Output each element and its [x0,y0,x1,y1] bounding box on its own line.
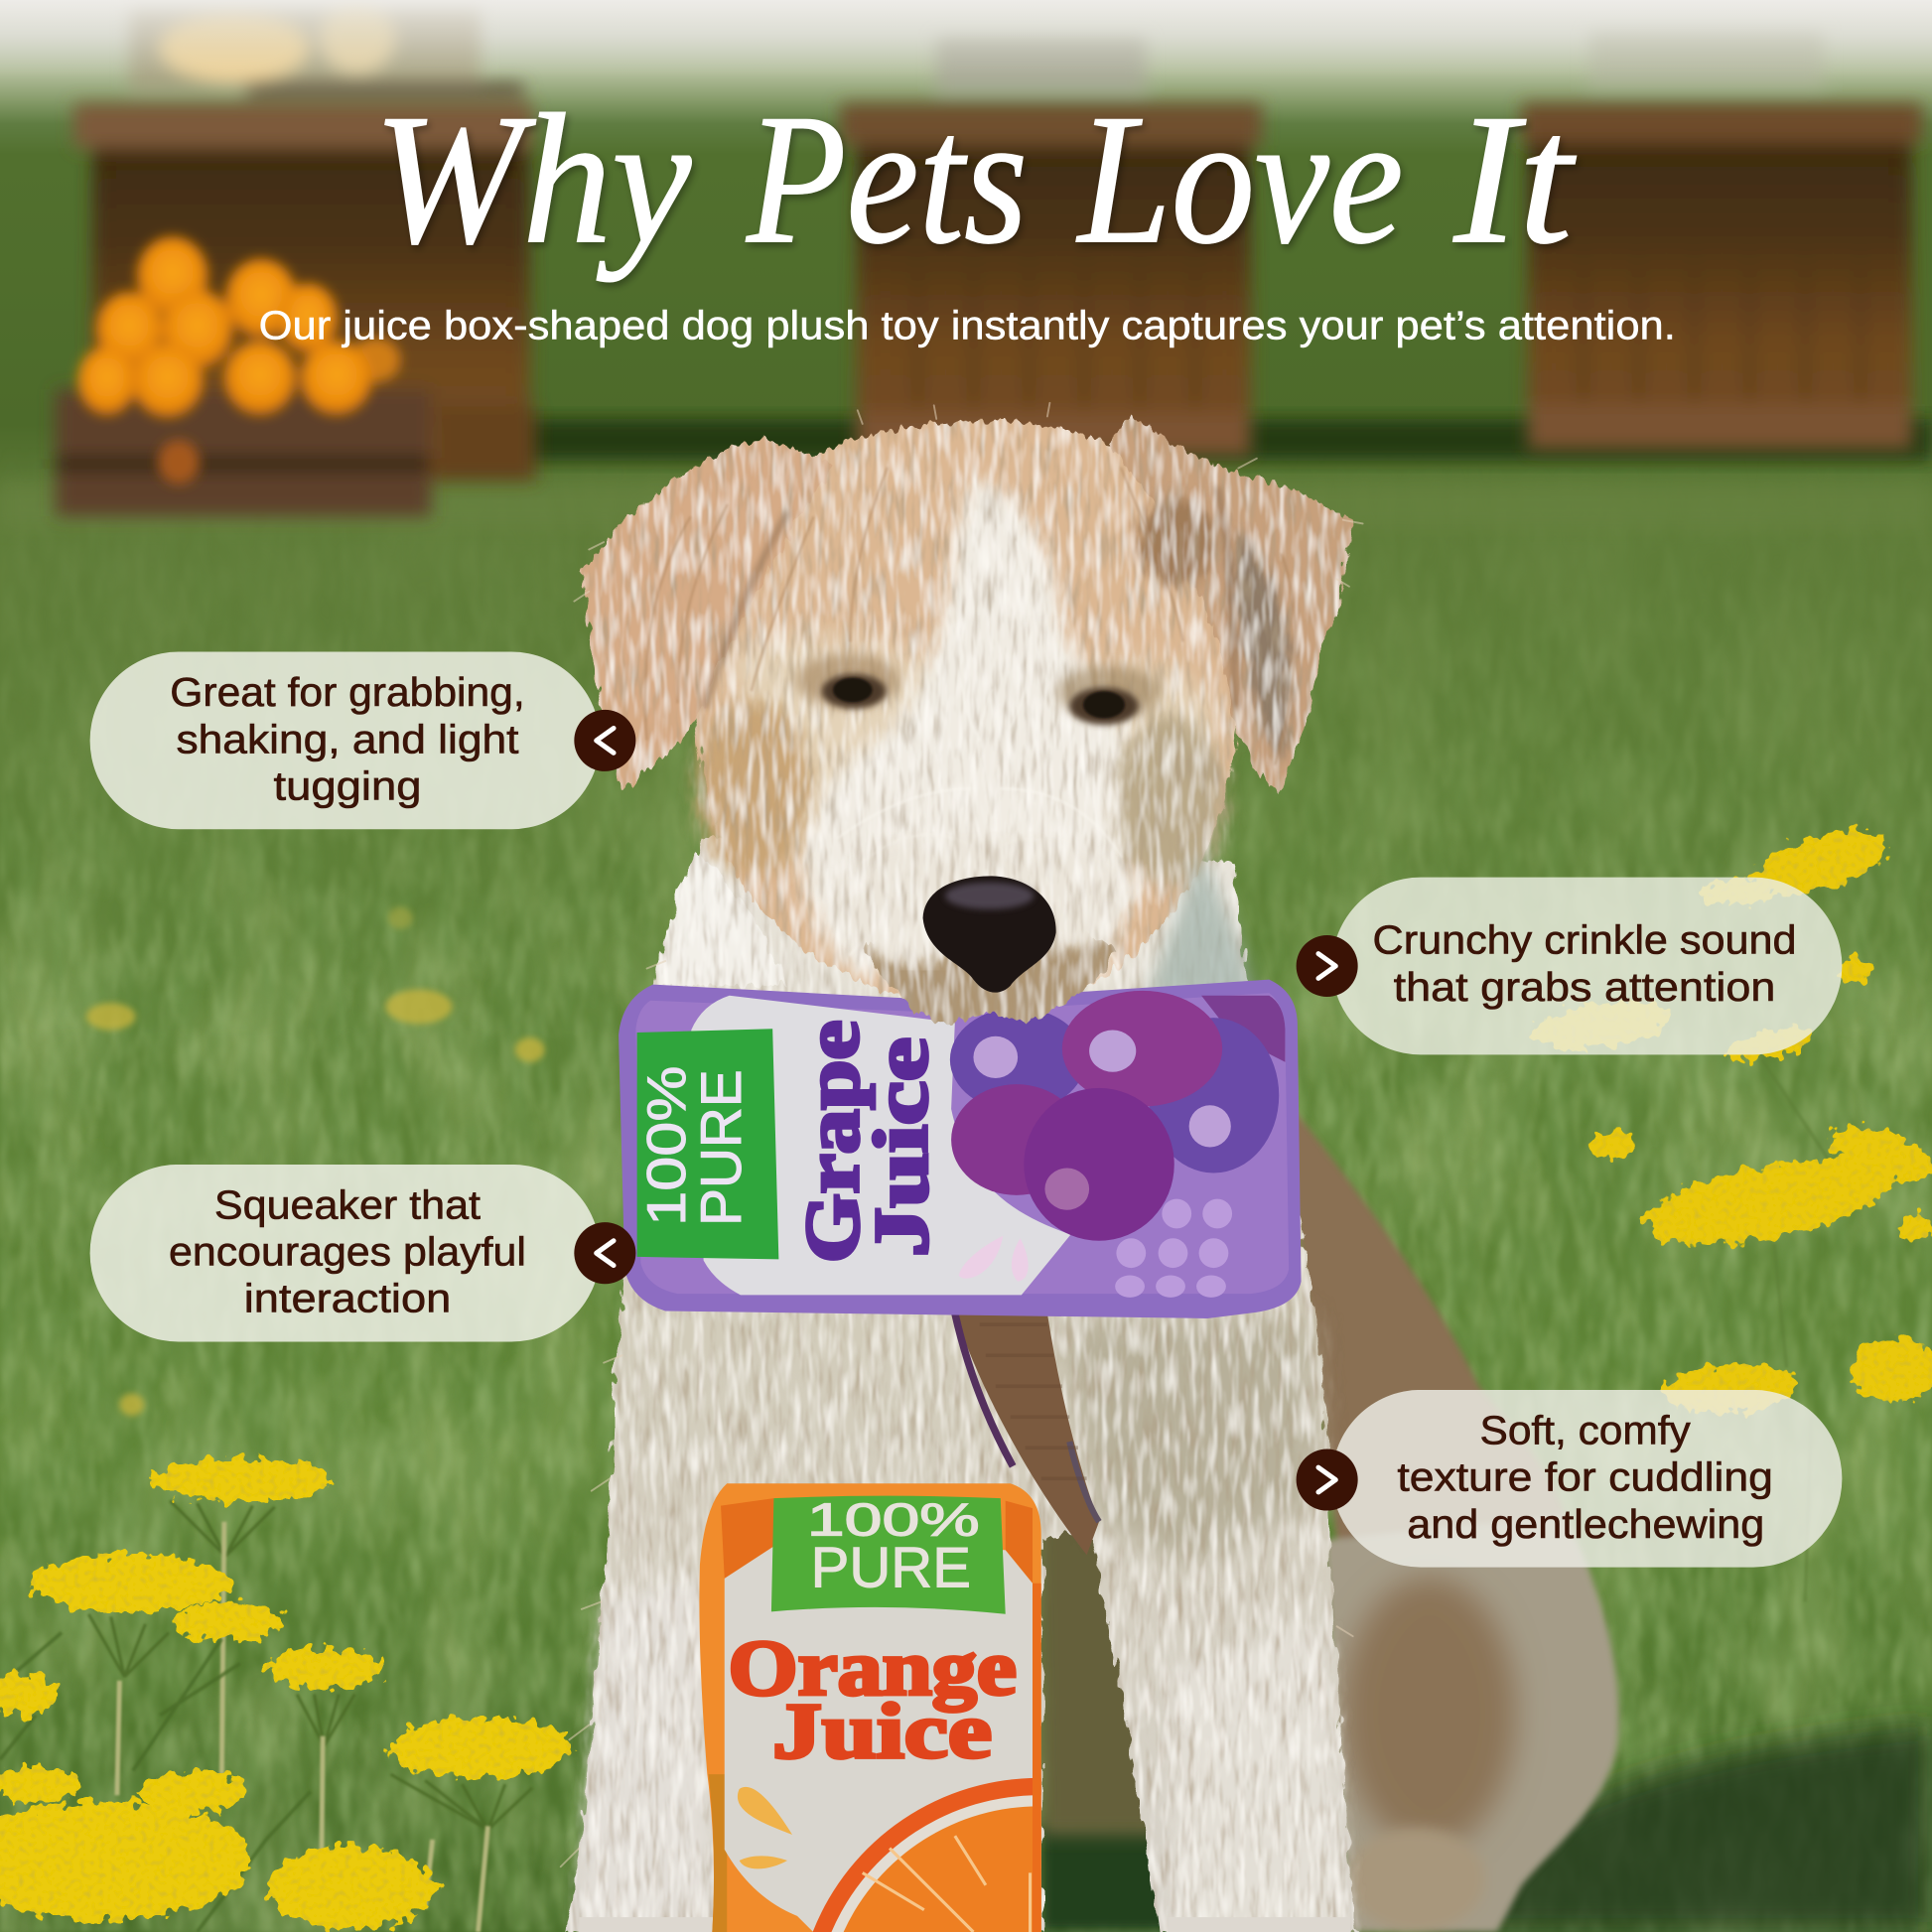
top right corner grape shade [1201,996,1285,1062]
crate ground shadow [431,419,1932,461]
green label [636,1029,778,1259]
grape dark centre [1024,1088,1174,1241]
callout text: texture for cuddling [1397,1454,1773,1500]
green flower stems [0,1632,311,1932]
grass dark blades [0,828,1931,1932]
market crate left [56,2,536,516]
callout text [1397,1408,1773,1547]
dog chest and legs [564,838,1355,1932]
grass light blades [0,619,1932,1932]
pill background [1332,878,1842,1054]
far grass strip [0,481,1932,530]
right cheek olive [1116,715,1225,888]
callout: texture [1297,1390,1842,1568]
dog belly shade [1035,1478,1189,1836]
grape juice toy [619,980,1302,1318]
arrow badge [574,710,635,771]
toy orange body [699,1483,1041,1932]
callout text: and gentlechewing [1407,1501,1764,1547]
chest grey shade [1059,1318,1318,1565]
pale flower stems [117,1522,487,1932]
right ear grey streak [1232,530,1292,763]
grape blue one [950,1008,1085,1111]
lower left cheek tan [697,700,811,878]
callout: squeaker [90,1165,635,1342]
grape circles [950,991,1279,1241]
100% text: 100% [636,1066,697,1226]
arrow badge [1297,935,1358,997]
oranges [77,236,400,484]
callout text: Crunchy crinkle sound [1373,917,1796,963]
right neck blue shade [1146,850,1257,998]
market crate centre [840,37,1262,456]
pill background [90,1165,600,1342]
title: Why [373,75,692,282]
white blaze and muzzle [801,475,1146,973]
PURE text: PURE [811,1537,971,1600]
orange fruit slice [813,1778,1041,1932]
arrow badge [574,1222,635,1284]
nose [923,876,1056,993]
ear creases [705,486,1236,709]
arrow badge [1297,1449,1358,1511]
dog furry silhouette [564,416,1355,1932]
grape highlights [973,1031,1231,1210]
grass light mottling [0,635,1932,1932]
Orange text: Orange [728,1624,1017,1712]
juice drops [738,1787,792,1868]
subtitle: Our juice box-shaped dog plush toy instantly captures your pet’s attention. [259,302,1676,347]
right leg white [1171,1626,1349,1932]
orange flesh [844,1806,1041,1932]
left ear [583,436,833,790]
green label [771,1493,1006,1614]
dog haunch out of focus [1282,1094,1618,1932]
left neck white [653,850,788,986]
callout text: Soft, comfy [1480,1408,1691,1453]
orange juice toy [699,1483,1041,1932]
dog haunch brown core [1343,1578,1516,1849]
purple dots [1115,1199,1232,1298]
callout: crinkle [1297,878,1842,1054]
face hairs [838,542,1121,967]
toy right edge [1033,1584,1041,1932]
mouth fur [863,911,1115,1026]
mouth fur light [826,838,1140,964]
edge wisps [561,403,1363,1866]
grape magenta left [951,1084,1082,1195]
Juice text: Juice [772,1688,992,1775]
toy corner darker left [721,1498,773,1579]
yellow flowers right [1528,817,1932,1601]
right brow dark patch [1138,497,1216,587]
dog muzzle over toy [826,838,1140,1026]
shadow on lawn bottom right [1417,1725,1932,1932]
tan hairs [645,469,1296,763]
Grape text: Grape [789,1021,875,1263]
Juice text: Juice [858,1037,943,1257]
callout text [1373,917,1796,1010]
callout text: interaction [244,1276,451,1321]
flower clusters [1528,817,1932,1418]
left eye [796,653,899,709]
callout text: encourages playful [169,1229,526,1275]
callout text: Squeaker that [214,1181,482,1227]
grape blue right [1149,1018,1279,1173]
yellow flowers left [0,1457,572,1932]
flower umbel stalks [88,1501,532,1830]
right ear [1109,416,1353,793]
100% text: 100% [807,1493,980,1545]
dog back tan [1282,1094,1565,1589]
nose highlight [945,883,1034,909]
callout text: that grabs attention [1394,964,1775,1010]
cream eye band [727,635,1220,850]
leash [955,1313,1099,1555]
dog paw [1349,1828,1484,1931]
title: It [1452,75,1577,282]
callout text: shaking, and light [176,716,519,761]
white label panel [691,996,1070,1295]
orange rind [813,1778,1041,1932]
blurred grass flowers [86,906,545,1416]
flower stems [1762,1059,1836,1601]
toy purple body [619,980,1302,1318]
flower clusters [0,1457,572,1930]
callout text: Great for grabbing, [170,669,525,715]
dog head [694,421,1239,1017]
fur bottom edge patches [579,1917,1350,1932]
shadow on lawn bottom [1041,1824,1176,1932]
market crate right [1522,31,1922,450]
morning fog [0,0,1932,76]
grass mottling and blades [0,444,1932,1932]
juice drops [959,1236,1029,1282]
callout text [170,669,525,808]
pill background [1332,1390,1842,1568]
orange pith [831,1795,1041,1932]
right eye [1057,665,1161,725]
title: Pets [746,75,1028,282]
toy lower shaded edge [709,1774,727,1932]
left leg white [579,1578,709,1932]
title [373,75,1577,282]
toy corner darker right [1006,1501,1033,1584]
dog haunch grey [1324,1516,1618,1932]
callout text [169,1181,526,1321]
title: Love [1075,75,1404,282]
dog [561,403,1618,1932]
callout: grabbing [90,652,635,829]
grape magenta top [1062,991,1222,1106]
PURE text: PURE [690,1069,754,1226]
toy inner purple [635,993,1289,1294]
pill background [90,652,600,829]
white label panel [725,1547,1033,1932]
callout text: tugging [274,762,421,808]
slice lines [863,1836,1031,1932]
